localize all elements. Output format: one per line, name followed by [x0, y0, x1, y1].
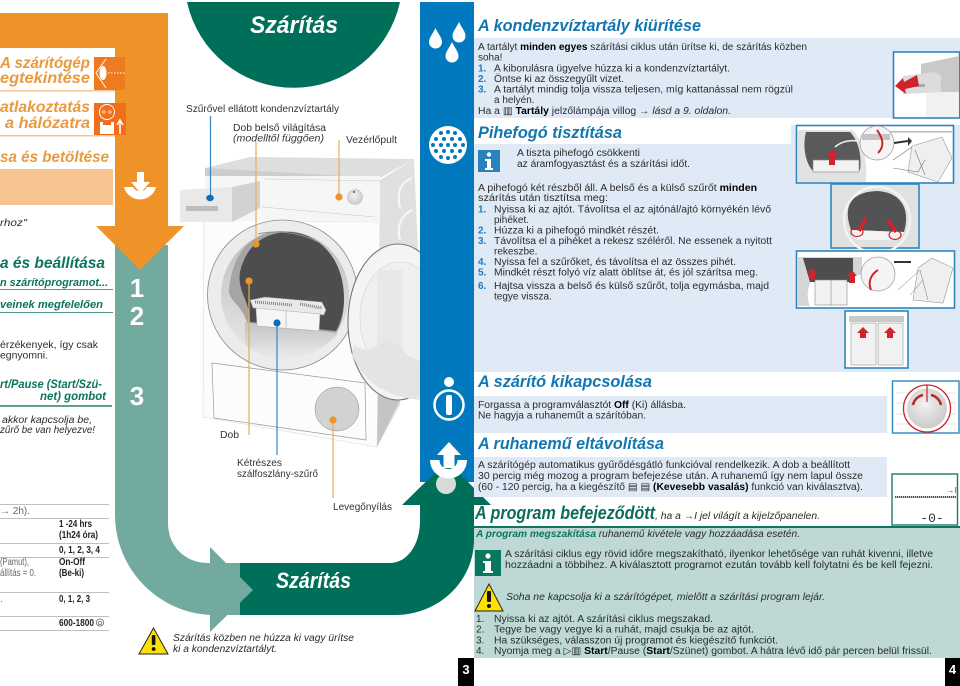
cleaning steps: Távolítsa el a pihéket a rekesz széléről. Ne essenek a nyitott — [494, 236, 772, 247]
step numbers — [130, 273, 144, 411]
text: 30 percig még mozog a program befejezése után. A ruhanemű így nem lapul össze — [478, 471, 863, 482]
icon: water drops — [429, 22, 466, 63]
info text — [505, 549, 933, 571]
steps: Tegye be vagy vegye ki a ruhát, majd csukja be az ajtót. — [494, 624, 754, 636]
teal arrow head — [210, 547, 253, 632]
heading: betöltése: sa és betöltése — [0, 149, 109, 166]
heading: A szárító kikapcsolása: A szárító kikapcsolása — [477, 372, 652, 391]
instructions: a helyén. — [494, 95, 535, 106]
settings table: . — [0, 594, 3, 605]
text block: érzékenyek: egnyomni. — [0, 350, 48, 362]
heading circle: Szárítás — [187, 2, 400, 88]
teal flow band with steps — [115, 245, 240, 615]
panel: switch off — [474, 372, 959, 433]
settings table: On-Off — [59, 557, 86, 568]
instructions: A kiborulásra ügyelve húzza ki a kondenzvíztartályt. — [494, 64, 730, 74]
instructions: Öntse ki az összegyűlt vizet. — [494, 73, 624, 85]
dryer body — [203, 220, 380, 447]
subheading: szárítóprogramot: n szárítóprogramot... — [0, 277, 108, 289]
door opening — [208, 220, 358, 370]
figure: opening filter — [796, 126, 954, 183]
cleaning steps: 5. — [478, 268, 487, 278]
labels: dryer parts: (modelltől függően) — [233, 134, 324, 144]
info text: A tiszta pihefogó csökkenti — [517, 148, 640, 159]
text: A szárítógép automatikus gyűrődésgátló funkcióval rendelkezik. A dob a beállított — [478, 460, 850, 471]
text — [478, 460, 863, 493]
cleaning steps: A pihefogó két részből áll. A belső és a külső szűrőt minden — [478, 183, 757, 194]
text: (60 - 120 percig, ha a kiegészítő ▤ ▤ (Kevesebb vasalás) funkció van kiválasztva). — [478, 482, 863, 493]
page number 4: 4 — [949, 662, 957, 677]
figure: display: →I — [946, 485, 957, 495]
settings table — [0, 504, 109, 631]
heading: A szárítógép megtekintése — [0, 48, 115, 92]
drawer — [180, 181, 260, 222]
page number 3: 3 — [462, 662, 470, 677]
settings table: állítás = 0. — [0, 568, 36, 579]
italic warning text — [0, 415, 95, 436]
instructions: A tartályt mindig tolja vissza teljesen, míg kattanással nem rögzül — [494, 84, 793, 96]
instructions: 2. — [478, 74, 487, 85]
text: Forgassa a programválasztót Off (Ki) állásba. — [478, 400, 686, 411]
figure: opened filters — [845, 311, 908, 368]
italic warning text: akkor kapcsolja be, — [2, 415, 92, 426]
page number 4 — [945, 658, 960, 686]
steps: 2. — [476, 624, 484, 636]
figure: pull out tank — [894, 52, 960, 118]
settings table: (Pamut), — [0, 557, 29, 568]
settings table: (1h24 óra) — [59, 530, 98, 541]
step numbers: 1 — [130, 273, 144, 303]
callout dots — [206, 193, 343, 424]
warning — [475, 584, 825, 611]
cleaning steps: Nyissa ki az ajtót. Távolítsa el az ajtónál/ajtó környékén lévő — [494, 204, 771, 216]
settings table: 0, 1, 2, 3, 4 — [59, 545, 100, 556]
heading: A program befejeződött — [474, 503, 820, 523]
instructions: 3. — [478, 84, 487, 96]
settings table: → 2h). — [0, 506, 30, 517]
heading: csatlakoztatás a hálózatra: a hálózatra — [5, 115, 90, 132]
label: Szárítás band: Szárítás — [276, 568, 351, 593]
labels: dryer parts: Levegőnyílás — [333, 502, 392, 513]
steps: 4. — [476, 646, 484, 657]
illustration: dryer — [180, 157, 448, 447]
callout leaders — [210, 116, 339, 498]
cleaning steps: 1. — [478, 204, 487, 216]
dryer top — [205, 157, 414, 178]
heading: Pihefogó tisztítása: Pihefogó tisztítása — [478, 123, 622, 142]
panel: lint filter — [474, 123, 960, 372]
info text: A szárítási ciklus egy rövid időre megszakítható, ilyenkor lehetősége van ruhát kivenni, illetve — [505, 549, 933, 560]
steps: Ha szükséges, válasszon új programot és kiegészítő funkciót. — [494, 636, 778, 646]
settings table: 1 -24 hrs — [59, 519, 92, 530]
instructions: Ha a ▥ Tartály jelzőlámpája villog → lásd a 9. oldalon. — [478, 106, 731, 117]
heading: Start/Pause gomb — [0, 377, 112, 407]
cleaning steps: 4. — [478, 257, 487, 268]
orange flow arrow — [94, 13, 184, 270]
lower panel — [212, 363, 366, 440]
figure: removing filter — [796, 251, 954, 308]
steps: Nyomja meg a ▷▥ Start/Pause (Start/Szünet) gombot. A hátra lévő idő pár percen belül frissül. — [494, 646, 932, 657]
blue icon column — [420, 2, 474, 482]
control panel — [205, 176, 380, 221]
instructions: A tartályt minden egyes szárítási ciklus után ürítse ki, de szárítás közben — [478, 42, 807, 53]
cleaning steps: 6. — [478, 281, 487, 292]
cleaning steps: szárítás után tisztítsa meg: — [478, 193, 608, 204]
instructions: 1. — [478, 64, 487, 74]
info text: az áramfogyasztást és a szárítási időt. — [517, 159, 690, 170]
heading: A program megszakítása: A program megszakítása ruhanemű kivétele vagy hozzáadása esetén. — [475, 529, 800, 540]
cleaning steps: tegye vissza. — [494, 292, 552, 302]
text block: érzékenyek: érzékenyek, így csak — [0, 340, 99, 351]
instructions — [478, 42, 807, 117]
steps — [476, 614, 932, 657]
labels: dryer parts: Szűrővel ellátott kondenzvíztartály — [186, 104, 339, 115]
figure: dial: Off — [924, 383, 931, 388]
icon: info green — [475, 550, 501, 576]
labels: dryer parts: Dob — [220, 430, 239, 441]
heading: Start/Pause gomb: net) gombot — [40, 389, 107, 403]
panel: condensate tank — [474, 16, 960, 118]
icon: eye — [94, 57, 126, 90]
heading: A kondenzvíztartály kiürítése: A kondenzvíztartály kiürítése — [477, 16, 701, 35]
icon: switch off — [434, 377, 464, 420]
open door — [348, 244, 448, 400]
heading circle: Szárítás: Szárítás — [250, 12, 338, 39]
heading: A szárítógép megtekintése: A szárítógép — [0, 55, 90, 72]
cleaning steps: Hajtsa vissza a belső és külső szűrőt, tolja egymásba, majd — [494, 281, 769, 292]
cleaning steps: 2. — [478, 226, 487, 236]
icon: info — [478, 150, 500, 172]
orange top bar — [0, 13, 168, 49]
figure: display: -0- — [920, 511, 944, 526]
peach note box — [0, 169, 113, 205]
cleaning steps — [478, 183, 772, 302]
cleaning steps: Húzza ki a pihefogó mindkét részét. — [494, 226, 659, 236]
info text — [517, 148, 690, 170]
text block: érzékenyek — [0, 340, 99, 362]
panel: remove laundry — [474, 434, 887, 497]
warning: do not pull tank: Szárítás közben ne húzza ki vagy ürítse — [173, 633, 354, 644]
heading: csatlakoztatás a hálózatra — [0, 99, 115, 136]
heading: A ruhanemű eltávolítása: A ruhanemű eltávolítása — [477, 434, 664, 453]
subheading: igényeinek megfelelően: veinek megfelelően — [0, 299, 103, 311]
labels: dryer parts: szálfoszlány-szűrő — [237, 469, 318, 480]
warning: do not pull tank — [139, 628, 354, 655]
step numbers: 3 — [130, 381, 144, 411]
figure: display — [892, 474, 958, 526]
icon: load arrow — [124, 172, 156, 199]
page number 3 — [458, 658, 474, 686]
labels: dryer parts: Vezérlőpult — [346, 135, 397, 146]
text — [478, 400, 686, 422]
heading: Start/Pause gomb: rt/Pause (Start/Szü- — [0, 377, 102, 391]
steps: Nyissa ki az ajtót. A szárítási ciklus megszakad. — [494, 614, 713, 625]
steps: 1. — [476, 614, 484, 625]
cleaning steps: 3. — [478, 236, 487, 247]
italic warning text: zűrő be van helyezve! — [0, 425, 95, 436]
figure: dial — [892, 381, 959, 433]
settings table: 0, 1, 2, 3 — [59, 594, 90, 605]
heading: A program befejeződött: A program befejeződött — [474, 503, 656, 523]
cleaning steps: pihéket. — [494, 215, 529, 226]
labels: dryer parts — [186, 104, 397, 513]
cleaning steps: rekeszbe. — [494, 246, 537, 258]
icon: remove laundry — [430, 442, 467, 494]
steps: 3. — [476, 636, 484, 646]
lint filter — [250, 297, 326, 331]
labels: dryer parts: Kétrészes — [237, 458, 282, 469]
heading: kiválasztása és beállítása: a és beállítása — [0, 255, 105, 272]
panel: left page column — [0, 13, 168, 631]
panel: program interrupt — [474, 526, 960, 658]
settings table: 600-1800 — [59, 618, 94, 629]
icon: plug — [94, 103, 126, 135]
warning: do not pull tank: ki a kondenzvíztartályt. — [173, 644, 277, 655]
info text: hozzáadni a többihez. A kiválasztott programot ezután tovább kell folytatni és be kell fejezni. — [505, 560, 933, 571]
heading: A program befejeződött: , ha a →I jel világít a kijelzőpanelen. — [655, 511, 820, 522]
warning: Soha ne kapcsolja ki a szárítógépet, mielőtt a szárítási program lejár. — [506, 592, 825, 603]
dark green band — [240, 505, 474, 615]
figure: filter catches — [831, 184, 919, 253]
text: Ne hagyja a ruhaneműt a szárítóban. — [478, 410, 646, 422]
dryer side — [377, 159, 418, 447]
heading: A szárítógép megtekintése: egtekintése — [0, 70, 90, 87]
labels: dryer parts: Dob belső világítása — [233, 123, 326, 134]
cleaning steps: Nyissa fel a szűrőket, és távolítsa el az összes pihét. — [494, 257, 736, 268]
cleaning steps: Mindkét részt folyó víz alatt öblítse át, és jól szárítsa meg. — [494, 268, 758, 278]
green up arrow head — [402, 461, 491, 505]
settings table: (Be-ki) — [59, 568, 84, 579]
heading: csatlakoztatás a hálózatra: atlakoztatás — [0, 99, 90, 116]
step numbers: 2 — [130, 301, 144, 331]
icon: lint filter disc — [429, 126, 467, 164]
instructions: soha! — [478, 52, 502, 64]
dial — [348, 190, 362, 204]
small italic note: rhoz" — [0, 218, 28, 229]
air vent — [315, 387, 359, 431]
